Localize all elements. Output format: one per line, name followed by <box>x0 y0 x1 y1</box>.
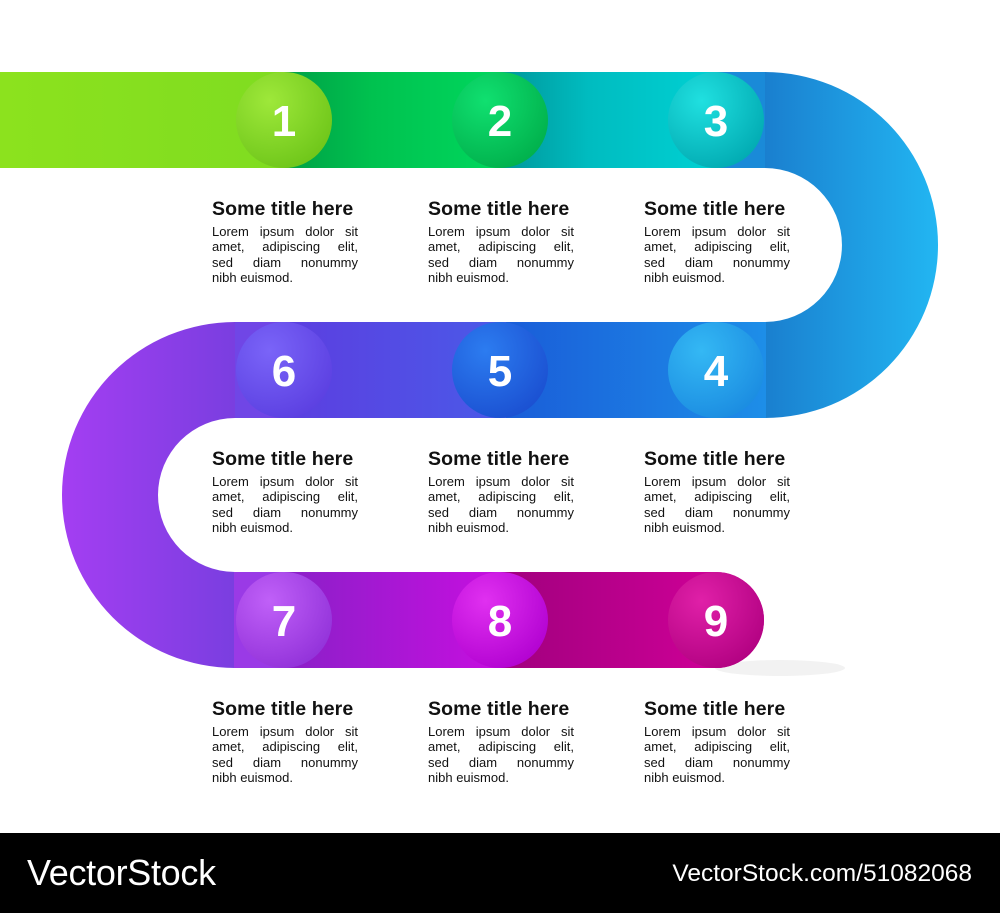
text 8: nibh euismod. <box>428 770 509 785</box>
circles with numbers: 5 <box>488 347 512 396</box>
footer url: VectorStock.com/51082068 <box>672 860 972 887</box>
circles with numbers: 3 <box>704 97 728 146</box>
text 8: Some title here <box>428 698 569 720</box>
text 6 <box>212 448 358 535</box>
text 7: Some title here <box>212 698 353 720</box>
footer bar <box>0 833 1000 913</box>
text 7: amet, adipiscing elit, <box>212 739 358 754</box>
text 1: amet, adipiscing elit, <box>212 239 358 254</box>
footer logo: VectorStock <box>27 852 216 893</box>
text 7: Lorem ipsum dolor sit <box>212 724 358 739</box>
text 1: sed diam nonummy <box>212 255 358 270</box>
text 6: amet, adipiscing elit, <box>212 489 358 504</box>
text 3: Lorem ipsum dolor sit <box>644 224 790 239</box>
text 2 <box>428 198 574 285</box>
text 2: amet, adipiscing elit, <box>428 239 574 254</box>
text 8: sed diam nonummy <box>428 755 574 770</box>
right arc <box>765 72 938 418</box>
text 2: sed diam nonummy <box>428 255 574 270</box>
circles with numbers: 2 <box>488 97 512 146</box>
text 5: Some title here <box>428 448 569 470</box>
circles with numbers: 8 <box>488 597 512 646</box>
circles with numbers: 6 <box>272 347 296 396</box>
circles with numbers: 7 <box>272 597 296 646</box>
text 2: nibh euismod. <box>428 270 509 285</box>
text 3: nibh euismod. <box>644 270 725 285</box>
text 9: nibh euismod. <box>644 770 725 785</box>
text 7: sed diam nonummy <box>212 755 358 770</box>
text 6: sed diam nonummy <box>212 505 358 520</box>
text 9: amet, adipiscing elit, <box>644 739 790 754</box>
text 6: Some title here <box>212 448 353 470</box>
text 6: Lorem ipsum dolor sit <box>212 474 358 489</box>
text 9: sed diam nonummy <box>644 755 790 770</box>
text 1 <box>212 198 358 285</box>
row 3 band <box>234 572 764 668</box>
text 6: nibh euismod. <box>212 520 293 535</box>
text 4: sed diam nonummy <box>644 505 790 520</box>
text 9: Lorem ipsum dolor sit <box>644 724 790 739</box>
text 2: Lorem ipsum dolor sit <box>428 224 574 239</box>
text 8 <box>428 698 574 785</box>
text 9: Some title here <box>644 698 785 720</box>
circles with numbers: 9 <box>704 597 728 646</box>
left arc <box>62 322 235 668</box>
text 9 <box>644 698 790 785</box>
text 4: Some title here <box>644 448 785 470</box>
text 5: Lorem ipsum dolor sit <box>428 474 574 489</box>
circles with numbers <box>236 72 764 668</box>
text 5 <box>428 448 574 535</box>
text 4 <box>644 448 790 535</box>
text 5: nibh euismod. <box>428 520 509 535</box>
text 5: amet, adipiscing elit, <box>428 489 574 504</box>
text 3: sed diam nonummy <box>644 255 790 270</box>
text 4: Lorem ipsum dolor sit <box>644 474 790 489</box>
text 1: Some title here <box>212 198 353 220</box>
text 1: Lorem ipsum dolor sit <box>212 224 358 239</box>
text 2: Some title here <box>428 198 569 220</box>
text 4: amet, adipiscing elit, <box>644 489 790 504</box>
text 5: sed diam nonummy <box>428 505 574 520</box>
text 8: amet, adipiscing elit, <box>428 739 574 754</box>
text 3: Some title here <box>644 198 785 220</box>
text 4: nibh euismod. <box>644 520 725 535</box>
row 1 band <box>0 72 766 168</box>
text 1: nibh euismod. <box>212 270 293 285</box>
text 3 <box>644 198 790 285</box>
text 3: amet, adipiscing elit, <box>644 239 790 254</box>
text 7 <box>212 698 358 785</box>
circles with numbers: 4 <box>704 347 729 396</box>
text 7: nibh euismod. <box>212 770 293 785</box>
circles with numbers: 1 <box>272 97 296 146</box>
text 8: Lorem ipsum dolor sit <box>428 724 574 739</box>
row 2 band <box>234 322 766 418</box>
